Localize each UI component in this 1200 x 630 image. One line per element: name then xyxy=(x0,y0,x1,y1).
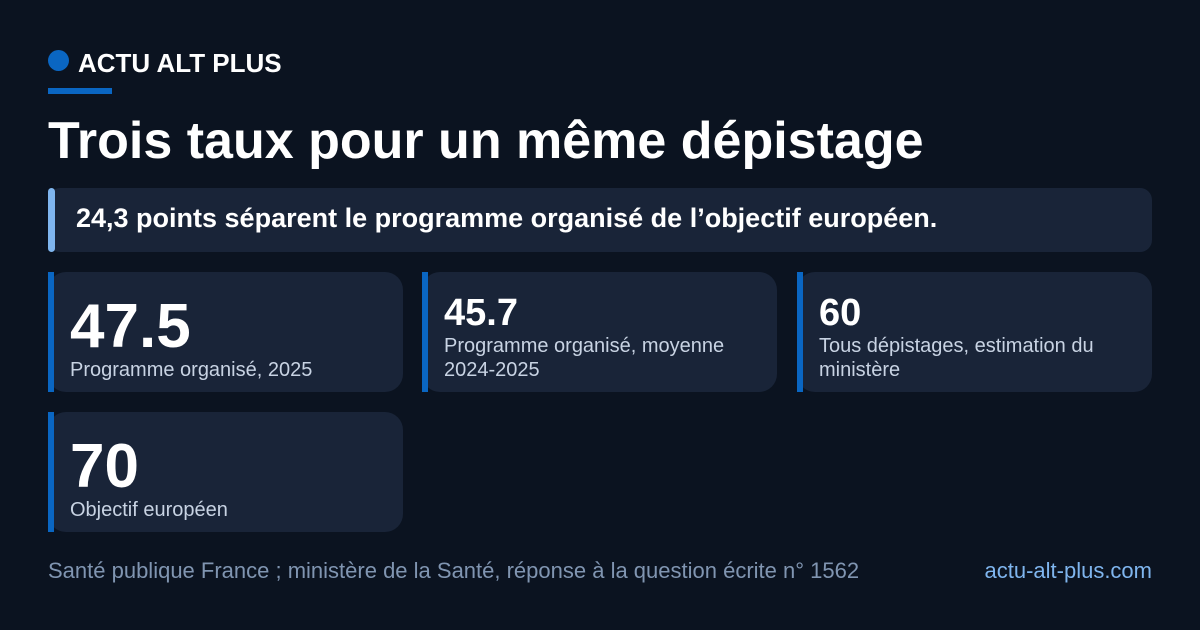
callout accent bar xyxy=(48,188,55,252)
brand header xyxy=(48,48,282,94)
title: Trois taux pour un même dépistage xyxy=(48,112,924,170)
value: 45.7 xyxy=(444,292,518,334)
label: Tous dépistages, estimation du xyxy=(819,335,1094,357)
card accent bar xyxy=(48,412,54,532)
label xyxy=(444,335,724,381)
label xyxy=(819,335,1094,381)
card: moyenne 2024-2025 xyxy=(422,272,777,392)
label: ministère xyxy=(819,359,900,381)
label: Programme organisé, 2025 xyxy=(70,359,312,381)
card accent bar xyxy=(797,272,803,392)
source: Santé publique France ; ministère de la Santé, réponse à la question écrite n° 1562 xyxy=(48,558,859,583)
brand name: ACTU ALT PLUS xyxy=(78,48,282,78)
site url: actu-alt-plus.com xyxy=(984,558,1152,583)
value: 70 xyxy=(70,432,139,501)
icon: brand dot xyxy=(48,50,69,71)
brand underline xyxy=(48,88,112,94)
card: objectif européen xyxy=(48,412,403,532)
card accent bar xyxy=(48,272,54,392)
callout text: 24,3 points séparent le programme organisé de l’objectif européen. xyxy=(76,203,937,233)
label: 2024-2025 xyxy=(444,359,540,381)
card accent bar xyxy=(422,272,428,392)
card: tous dépistages xyxy=(797,272,1152,392)
label: Programme organisé, moyenne xyxy=(444,335,724,357)
label: Objectif européen xyxy=(70,499,228,521)
callout xyxy=(48,188,1152,252)
value: 47.5 xyxy=(70,292,191,361)
card: programme organisé 2025 xyxy=(48,272,403,392)
value: 60 xyxy=(819,292,861,334)
